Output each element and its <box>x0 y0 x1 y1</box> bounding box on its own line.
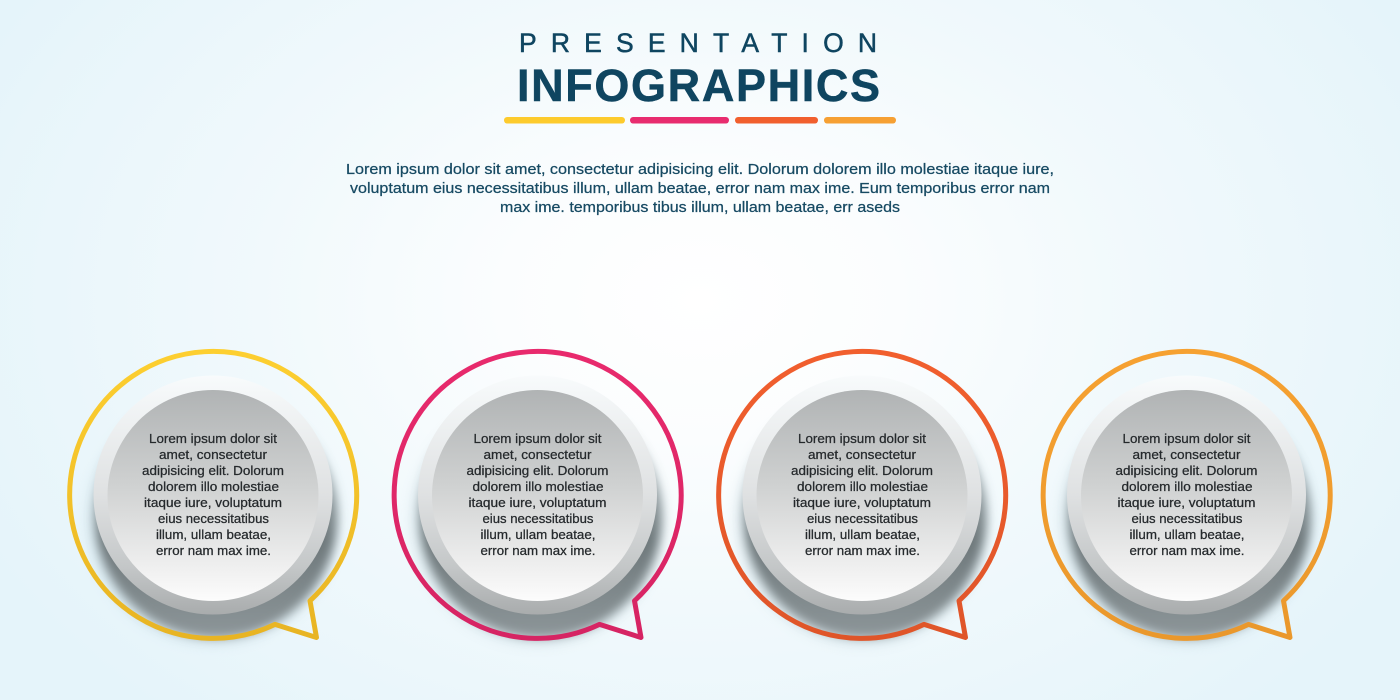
button outer disc <box>94 376 332 614</box>
body text: Lorem ipsum dolor sit <box>798 432 927 446</box>
body text: itaque iure, voluptatum <box>468 496 606 510</box>
yellow bubble outline <box>70 351 357 638</box>
body text: Lorem ipsum dolor sit <box>1122 432 1251 446</box>
amber bubble outline <box>1043 351 1330 638</box>
body text: amet, consectetur <box>1132 448 1240 462</box>
body text: error nam max ime. <box>156 544 271 558</box>
body text <box>466 432 608 558</box>
button outer disc <box>418 376 657 614</box>
body text: illum, ullam beatae, <box>1130 528 1244 542</box>
body text: adipisicing elit. Dolorum <box>1116 464 1258 478</box>
body text: amet, consectetur <box>159 448 267 462</box>
body text: adipisicing elit. Dolorum <box>466 464 608 478</box>
body text: eius necessitatibus <box>158 512 269 526</box>
body text: dolorem illo molestiae <box>148 480 279 494</box>
body text: illum, ullam beatae, <box>156 528 271 542</box>
body text: error nam max ime. <box>480 544 596 558</box>
panel: yellow speech bubble <box>70 351 357 645</box>
body text: adipisicing elit. Dolorum <box>142 464 284 478</box>
title: presentation infographics: INFOGRAPHICS <box>517 60 880 111</box>
intro paragraph: max ime. temporibus tibus illum, ullam beatae, err aseds <box>500 199 900 216</box>
body text: Lorem ipsum dolor sit <box>149 432 278 446</box>
body text: eius necessitatibus <box>807 512 918 526</box>
body text: itaque iure, voluptatum <box>793 496 931 510</box>
panel: orange speech bubble <box>719 351 1006 645</box>
body text: dolorem illo molestiae <box>472 480 604 494</box>
body text: itaque iure, voluptatum <box>1118 496 1256 510</box>
body text: eius necessitatibus <box>1132 512 1242 526</box>
panel: pink speech bubble <box>394 351 681 645</box>
pink bubble outline <box>394 351 681 638</box>
button outer disc <box>1067 376 1306 614</box>
button inner disc <box>1081 390 1292 601</box>
title: presentation infographics: PRESENTATION <box>519 28 877 58</box>
panel: amber speech bubble <box>1043 351 1330 645</box>
body text: error nam max ime. <box>1130 544 1244 558</box>
colored title underline <box>504 117 896 124</box>
button outer disc <box>742 376 982 614</box>
intro paragraph <box>346 161 1054 216</box>
button inner disc <box>108 390 318 601</box>
title: presentation infographics <box>517 28 880 111</box>
body text: itaque iure, voluptatum <box>144 496 282 510</box>
body text: amet, consectetur <box>484 448 592 462</box>
body text: adipisicing elit. Dolorum <box>791 464 933 478</box>
body text: illum, ullam beatae, <box>480 528 596 542</box>
body text <box>142 432 284 558</box>
body text <box>791 432 933 558</box>
intro paragraph: Lorem ipsum dolor sit amet, consectetur adipisicing elit. Dolorum dolorem illo molestiae itaque iure, <box>346 161 1054 178</box>
orange bubble outline <box>719 351 1006 638</box>
button inner disc <box>432 390 643 601</box>
body text: illum, ullam beatae, <box>805 528 920 542</box>
body text: dolorem illo molestiae <box>797 480 928 494</box>
button inner disc <box>756 390 968 601</box>
body text: eius necessitatibus <box>482 512 594 526</box>
body text: Lorem ipsum dolor sit <box>474 432 602 446</box>
body text: amet, consectetur <box>808 448 916 462</box>
body text: error nam max ime. <box>805 544 920 558</box>
body text <box>1116 432 1258 558</box>
intro paragraph: voluptatum eius necessitatibus illum, ullam beatae, error nam max ime. Eum temporibus error nam <box>350 180 1050 197</box>
body text: dolorem illo molestiae <box>1122 480 1253 494</box>
